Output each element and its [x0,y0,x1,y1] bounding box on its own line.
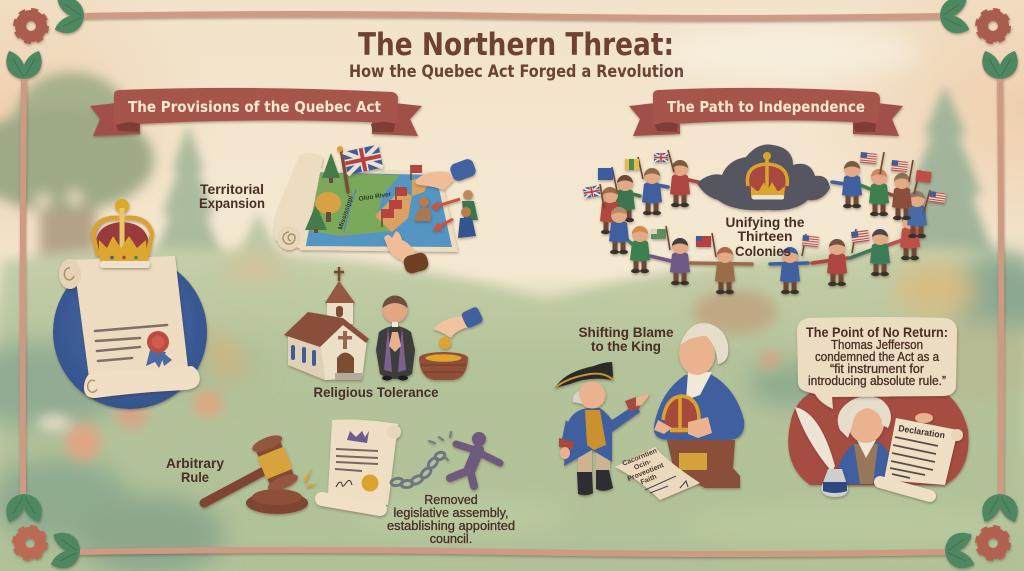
bubble text: introducing absolute rule.” [808,374,946,388]
fleeing figure [429,432,500,486]
gavel [204,432,318,514]
bottom hand [384,231,430,275]
coin basket [419,352,468,380]
dropped proclamation: Proveotient [627,462,666,483]
label: to the King [591,338,661,354]
church [284,267,369,380]
territorial expansion label: Expansion [199,195,265,211]
ring of colonists [600,160,927,294]
settlers and arrows [414,190,478,238]
top hand [416,157,477,190]
jefferson [835,396,892,484]
shifting blame to the king [555,323,744,500]
removed assembly note: Removed [424,493,478,507]
label [166,455,224,485]
title [349,27,684,81]
map sheet: Mississippi [337,195,355,231]
arbitrary rule group [166,420,515,546]
royal charter scroll with crown [53,199,207,409]
territorial expansion label [199,181,265,211]
colonial flags [583,150,946,257]
dropped proclamation: Ocin- [633,458,653,472]
label [726,214,805,259]
removed assembly note: council. [430,532,472,546]
bubble text: “fit instrument for [830,362,924,376]
british flag [337,145,383,192]
label: Thirteen [738,228,792,244]
removed assembly note [387,493,515,546]
quill and ink [795,407,848,497]
banner: provisions [90,88,422,136]
removed assembly note: establishing appointed [387,519,515,533]
storm cloud with crown [697,144,830,210]
label: Rule [181,469,209,485]
banner: path to independence [629,88,903,136]
speech bubble [797,317,957,409]
declaration scroll [880,413,963,496]
banner: provisions: The Provisions of the Quebec Act [128,98,382,116]
unifying the thirteen colonies [583,144,946,294]
hand dropping coin [433,306,484,349]
dropped proclamation: Cacorntien [622,448,658,468]
map sheet: Ohio River [358,191,392,203]
dropped proclamation: Faith [640,474,658,486]
banner: path to independence: The Path to Independence [667,98,865,116]
label [578,324,674,354]
removed assembly note: legislative assembly, [394,506,508,520]
the point of no return [788,317,969,497]
religious tolerance group [284,267,484,400]
bubble text: Thomas Jefferson [831,338,923,352]
map of expanded territory [274,145,478,275]
declaration scroll: Declaration [898,423,946,440]
king on pedestal [654,323,744,488]
bubble text: condemned the Act as a [815,350,939,364]
dropped proclamation [615,447,700,500]
revolutionary soldier [555,362,649,495]
main heading: The Northern Threat: [358,27,674,63]
bubble text: The Point of No Return: [806,324,948,340]
small claim flags [382,165,422,227]
parchment scroll [59,256,200,398]
label: Religious Tolerance [314,384,439,400]
label: Unifying the [726,214,805,230]
label: Arbitrary [166,455,224,471]
decree scroll [322,420,401,509]
label: Shifting Blame [578,324,674,340]
crown [93,199,152,268]
blue disc [53,255,207,409]
priest [376,296,415,380]
label: Colonies [735,243,791,259]
subtitle: How the Quebec Act Forged a Revolution [349,62,684,81]
map sheet [274,153,458,252]
bubble text [806,324,948,388]
red backdrop [788,386,969,485]
broken chain [390,451,446,488]
territorial expansion label: Territorial [200,181,264,197]
